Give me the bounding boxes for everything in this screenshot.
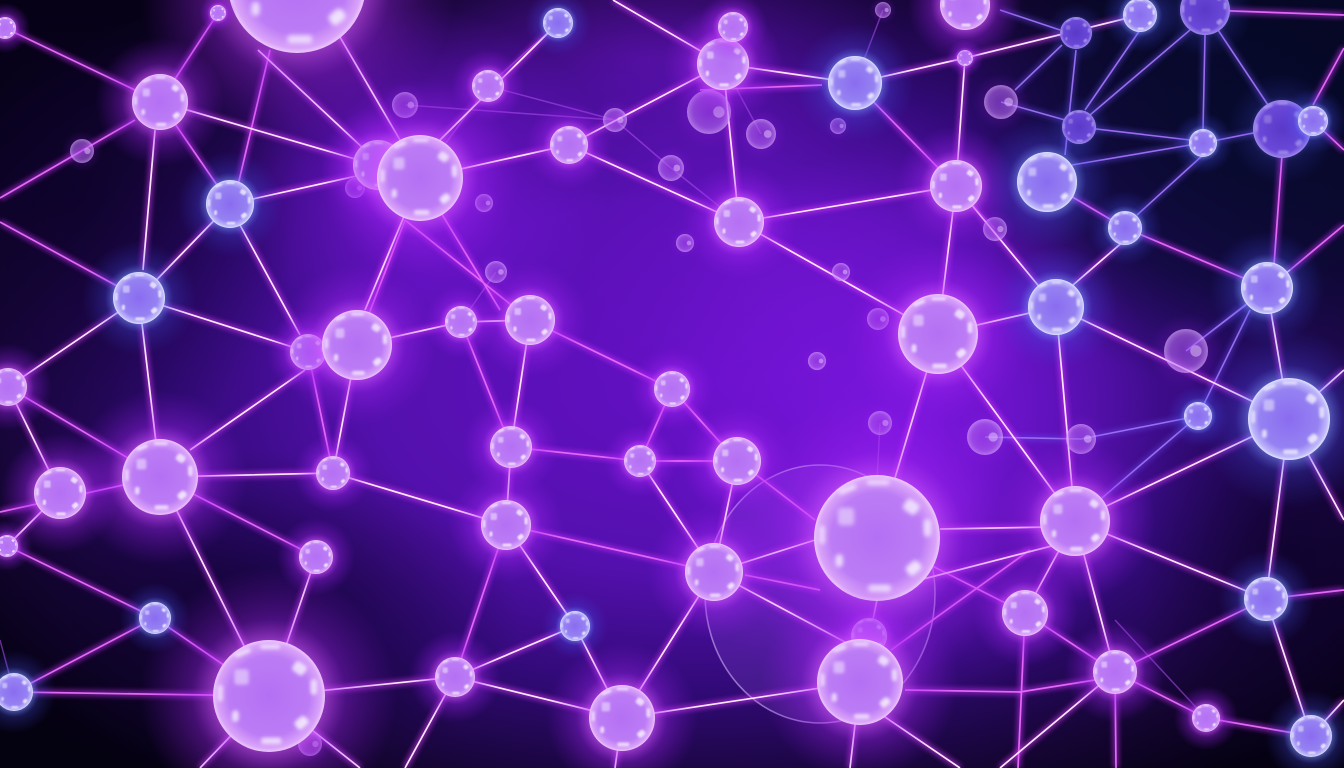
- purple links: [985, 10, 1313, 521]
- node: [647, 505, 781, 639]
- node: [947, 40, 983, 76]
- node: [96, 38, 224, 166]
- node: [267, 311, 349, 393]
- node: [1199, 329, 1344, 509]
- node: [1047, 95, 1111, 159]
- node: [761, 583, 959, 768]
- node: [0, 433, 120, 553]
- node: [1103, 0, 1177, 52]
- node: [472, 262, 588, 378]
- node: [140, 567, 398, 768]
- node: [0, 343, 52, 431]
- node: [525, 101, 613, 189]
- node: [294, 434, 372, 512]
- node: [1227, 74, 1337, 184]
- node: [1174, 686, 1238, 750]
- node: [698, 0, 768, 62]
- node: [1158, 0, 1252, 58]
- node: [525, 0, 591, 56]
- node: [321, 79, 519, 277]
- node: [1210, 231, 1324, 345]
- node: [276, 264, 438, 426]
- node: [732, 393, 1022, 683]
- node: [1046, 3, 1106, 63]
- node: [1167, 385, 1229, 447]
- node: [0, 521, 32, 571]
- node: [542, 593, 608, 659]
- node: [1218, 551, 1314, 647]
- node: [603, 424, 677, 498]
- purple link glow: [985, 10, 1313, 521]
- node: [994, 245, 1118, 369]
- node: [682, 406, 792, 516]
- node: [463, 399, 559, 495]
- node: [409, 631, 501, 723]
- node: [796, 24, 914, 142]
- node: [451, 49, 525, 123]
- node: [682, 164, 796, 280]
- node: [424, 285, 498, 359]
- node: [177, 151, 283, 257]
- node: [200, 0, 236, 31]
- node: [846, 242, 1030, 426]
- node: [448, 468, 564, 582]
- node: [82, 241, 196, 355]
- node: [663, 4, 783, 124]
- node: [981, 116, 1113, 248]
- node: [994, 440, 1156, 602]
- node: [896, 126, 1016, 246]
- node: [1064, 621, 1166, 723]
- node: [1265, 690, 1344, 768]
- large translucent bubble: [705, 465, 935, 723]
- node: [138, 0, 456, 143]
- node: [277, 518, 355, 596]
- node: [120, 583, 190, 653]
- node: [1088, 191, 1162, 265]
- node: [0, 3, 30, 53]
- node: [908, 0, 1022, 62]
- node: [972, 560, 1078, 666]
- node: [631, 348, 713, 430]
- node: [320, 108, 436, 222]
- node: [1280, 88, 1344, 154]
- node: [0, 650, 56, 734]
- node: [546, 642, 698, 768]
- node: [1172, 112, 1234, 174]
- node: [73, 390, 247, 564]
